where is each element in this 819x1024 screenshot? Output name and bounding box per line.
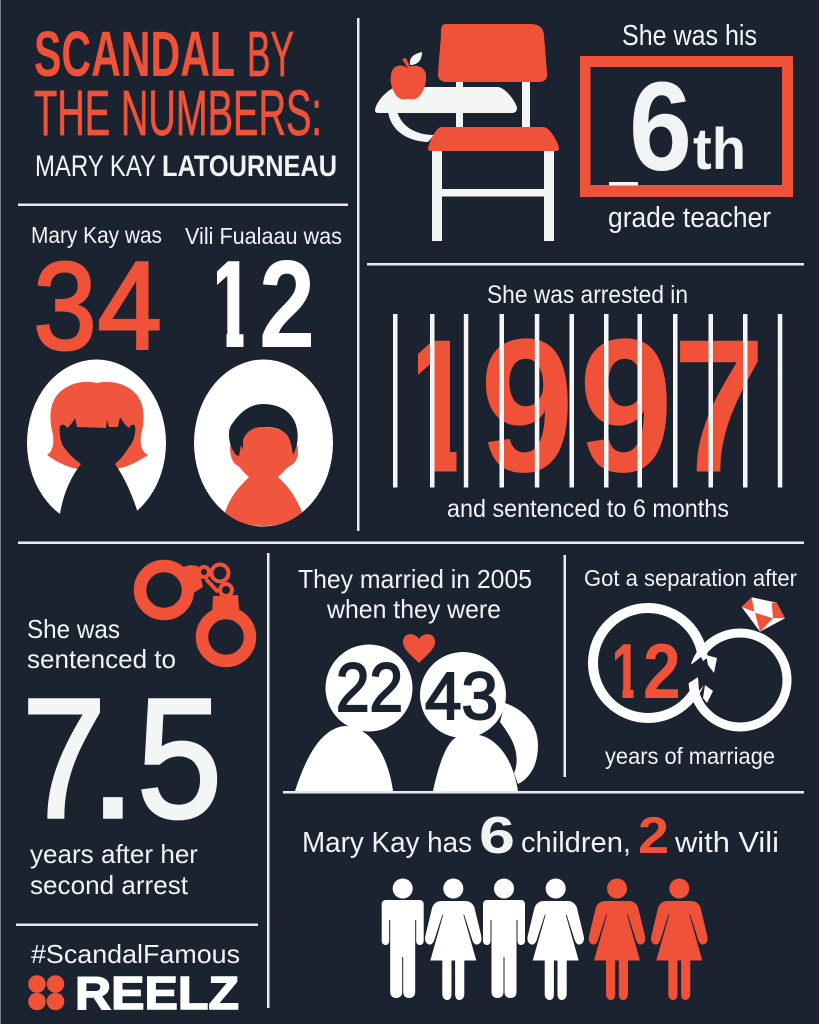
label: she was sentenced to: sentenced to [27, 644, 176, 674]
title: LATOURNEAU [162, 150, 337, 183]
groom with age 22: 22 [336, 649, 403, 726]
label: got a separation: Got a separation after [584, 565, 797, 591]
number: 7.5: 7 [22, 664, 106, 854]
number: 34: 4 [98, 238, 162, 376]
label: years after her second arrest [30, 839, 198, 900]
children heading: 6 [479, 807, 515, 865]
label: she was his: She was his [622, 20, 757, 52]
children heading: Mary Kay has [302, 827, 472, 859]
hashtag: #ScandalFamous [31, 939, 240, 969]
icon: apple [391, 52, 426, 99]
number: 12: 2 [259, 236, 315, 374]
children heading: 2 [638, 807, 669, 865]
chalkboard with 6th: th [693, 117, 746, 182]
icon row: six children [382, 878, 708, 1000]
child 1 [382, 878, 424, 998]
number: 7.5: . [89, 664, 136, 854]
child 6 [651, 878, 708, 1000]
year 1997 behind bars: 9 [579, 300, 673, 512]
label: years after her second arrest: years after her [30, 839, 198, 869]
number: 34 [34, 238, 162, 376]
portrait: woman silhouette [27, 360, 166, 532]
title: THE NUMBERS: [34, 77, 322, 149]
label: sentenced to 6 months: and sentenced to 6 months [447, 495, 729, 523]
icon: school desk chair [375, 24, 559, 241]
title: MARY KAY [35, 150, 156, 183]
child 2 [425, 878, 482, 1000]
label: years after her second arrest: second arrest [30, 870, 189, 900]
bride with age 43 [420, 652, 538, 791]
year 1997 behind bars [393, 300, 782, 512]
label: they married: when they were [326, 594, 501, 624]
chalkboard with 6th [580, 56, 793, 197]
children heading: with Vili [674, 827, 779, 859]
number: 12 in ring: 1 [611, 627, 641, 715]
title: SCANDAL [34, 18, 235, 90]
logo: REELZ: REELZ [75, 967, 239, 1019]
label: they married [298, 564, 532, 624]
year 1997 behind bars: 1 [400, 300, 475, 512]
number: 12: 1 [207, 236, 256, 374]
child 3 [483, 878, 525, 998]
number: 12 [200, 236, 315, 374]
children heading [302, 807, 779, 865]
number: 34: 3 [34, 238, 96, 376]
icon: broken rings [593, 597, 787, 727]
number: 7.5 [22, 664, 222, 854]
bride with age 43: 43 [425, 659, 498, 734]
number: 7.5: 5 [137, 664, 222, 854]
age label: Vili: Vili Fualaau was [185, 223, 342, 249]
chalkboard with 6th: 6 [629, 56, 692, 197]
label: she was sentenced to: She was [27, 614, 120, 644]
age label: Mary Kay: Mary Kay was [31, 222, 162, 248]
children heading: children, [521, 827, 631, 859]
child 4 [527, 878, 584, 1000]
icon: handcuffs [140, 564, 250, 661]
year 1997 behind bars: 9 [480, 300, 574, 512]
label: years of marriage: years of marriage [605, 743, 775, 769]
number: 12 in ring: 2 [643, 627, 681, 715]
icon: heart [403, 634, 435, 663]
title [34, 18, 337, 183]
label: they married: They married in 2005 [298, 564, 532, 594]
portrait: boy silhouette [194, 360, 333, 526]
label: grade teacher: grade teacher [608, 202, 771, 234]
title: BY [247, 18, 294, 90]
year 1997 behind bars: 7 [673, 300, 765, 512]
label: she was arrested in: She was arrested in [487, 281, 688, 309]
child 5 [589, 878, 645, 1000]
couple figures [295, 644, 538, 791]
icon: diamond [742, 597, 785, 632]
label: she was sentenced to [27, 614, 176, 674]
groom with age 22 [295, 644, 412, 791]
number: 12 in ring [606, 627, 681, 715]
